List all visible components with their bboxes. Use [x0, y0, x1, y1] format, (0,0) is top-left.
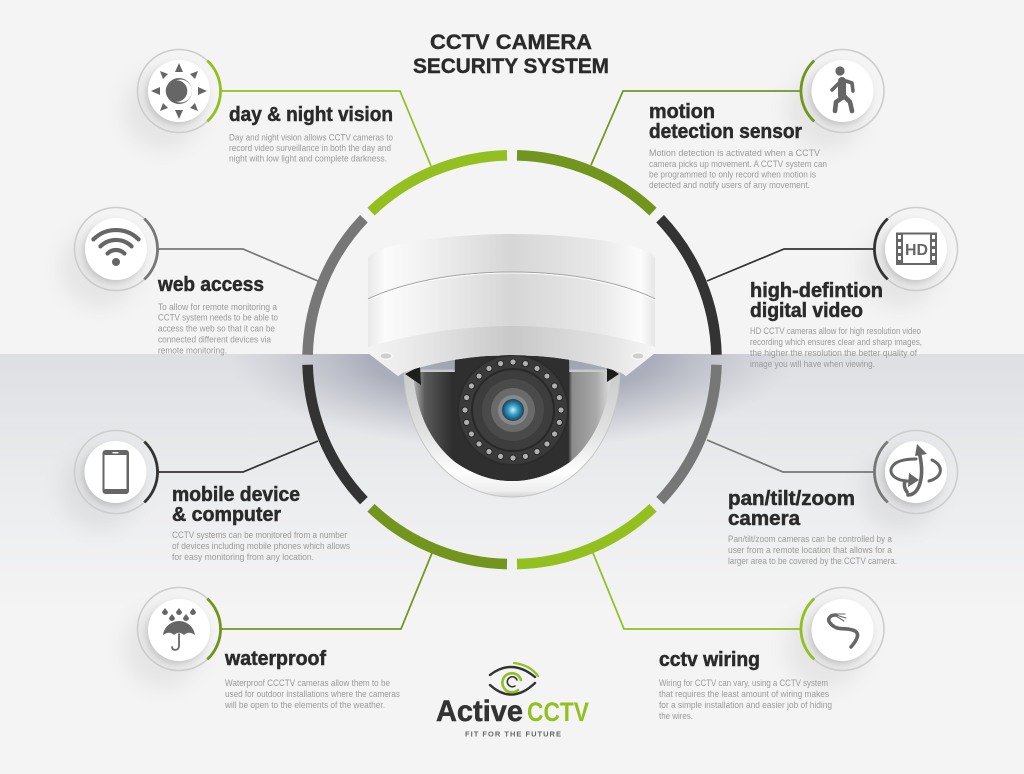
title: CCTV CAMERA [430, 31, 592, 54]
heading: waterproof [224, 648, 326, 670]
description: be programmed to only record when motion is [649, 170, 817, 180]
heading: detection sensor [649, 121, 802, 143]
description: connected different devices via [158, 334, 271, 344]
description [172, 530, 351, 562]
description: Wiring for CCTV can vary, using a CCTV system [659, 678, 828, 688]
description: the higher the resolution the better quality of [750, 348, 918, 358]
description [659, 678, 832, 721]
description: that requires the least amount of wiring makes [659, 689, 830, 699]
heading: mobile device [172, 484, 300, 506]
heading [750, 280, 883, 322]
wordmark accent: CCTV [527, 697, 589, 727]
description [728, 534, 897, 566]
heading: motion [649, 101, 715, 123]
icon: sun and moon [123, 50, 221, 150]
camera illustration [368, 234, 655, 497]
description: user from a remote location that allows for a [728, 545, 892, 555]
description: camera picks up movement. A CCTV system can [649, 159, 827, 169]
icon: walking person [786, 50, 884, 150]
description: used for outdoor installations where the cameras [225, 689, 401, 699]
description: recording which ensures clear and sharp images, [750, 337, 922, 347]
description: record video surveillance in both the day and [229, 143, 391, 153]
description: remote monitoring. [158, 346, 227, 356]
connector [593, 553, 801, 629]
connector [707, 249, 874, 281]
description: CCTV system needs to be able to [158, 312, 278, 322]
tagline: FIT FOR THE FUTURE [465, 730, 561, 738]
description: Pan/tilt/zoom cameras can be controlled by a [728, 534, 892, 544]
icon: wifi [60, 208, 158, 308]
description [750, 326, 922, 369]
description: To allow for remote monitoring a [158, 302, 277, 312]
icon: smartphone [60, 430, 158, 530]
heading: day & night vision [229, 104, 393, 126]
icon: eye [490, 663, 538, 695]
connector [591, 91, 801, 165]
heading: web access [157, 274, 264, 296]
description: Motion detection is activated when a CCTV [649, 148, 820, 158]
panel: pan/tilt/zoom camera [707, 430, 958, 566]
connector [707, 440, 874, 472]
connector [221, 553, 432, 629]
panel: high-definition digital video [707, 208, 958, 369]
description: access the web so that it can be [158, 324, 275, 334]
panel: web access [60, 208, 318, 356]
logo: Active CCTV [436, 663, 589, 738]
wordmark: Active [436, 695, 523, 728]
heading: camera [728, 508, 801, 530]
heading [172, 484, 300, 526]
panel: day & night vision [123, 50, 431, 166]
description: CCTV systems can be monitored from a number [172, 530, 347, 540]
heading: high-defintion [750, 280, 883, 302]
icon: umbrella and rain [123, 588, 221, 688]
description: image you will have when viewing. [750, 359, 875, 369]
segmented ring around camera [308, 155, 716, 564]
title [413, 31, 609, 78]
description: will be open to the elements of the weather. [224, 700, 385, 710]
description: for a simple installation and easier job of hiding [659, 700, 832, 710]
heading: digital video [750, 300, 863, 322]
description [229, 132, 393, 164]
panel: mobile device & computer [60, 430, 351, 562]
heading [649, 101, 802, 143]
heading: pan/tilt/zoom [728, 488, 855, 510]
description: detected and notify users of any movement. [649, 180, 810, 190]
icon: cable [786, 588, 884, 688]
icon: HD film [860, 208, 958, 308]
icon: rotation arrows [860, 430, 958, 531]
description [649, 148, 827, 190]
heading: cctv wiring [659, 649, 760, 671]
connector [158, 249, 318, 281]
panel: cctv wiring [593, 553, 884, 721]
connector [158, 441, 318, 472]
icon: HD film: HD [905, 242, 928, 259]
description: for easy monitoring from any location. [172, 552, 314, 562]
description: larger area to be covered by the CCTV camera. [728, 556, 897, 566]
description [158, 302, 278, 356]
panel: motion detection sensor [591, 50, 884, 190]
description: of devices including mobile phones which allows [172, 541, 351, 551]
description [224, 678, 401, 710]
panel: waterproof [123, 553, 432, 710]
description: Day and night vision allows CCTV cameras to [229, 132, 393, 142]
description: night with low light and complete darkness. [229, 154, 387, 164]
connector [221, 91, 431, 166]
heading: & computer [172, 504, 281, 526]
heading [728, 488, 855, 530]
description: Waterproof CCCTV cameras allow them to be [225, 678, 390, 688]
description: the wires. [659, 711, 693, 721]
title: SECURITY SYSTEM [413, 55, 609, 78]
description: HD CCTV cameras allow for high resolution video [750, 326, 921, 336]
